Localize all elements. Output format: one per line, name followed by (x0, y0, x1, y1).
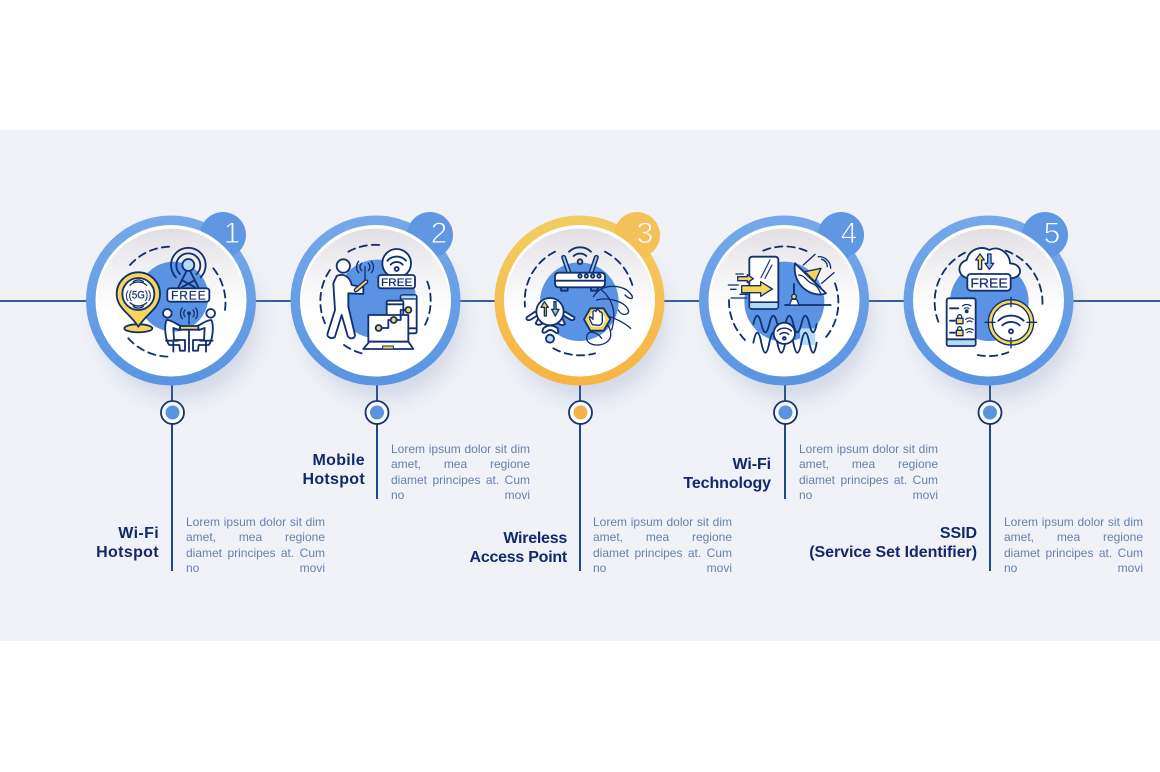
body text (391, 442, 530, 502)
body text: diamet principes at. Cum (391, 473, 530, 487)
connector and node (774, 385, 797, 499)
body text: Lorem ipsum dolor sit dim (593, 515, 732, 529)
body text (1004, 515, 1143, 575)
step 5: SSID (809, 212, 1143, 575)
icon: mobile hotspot: FREE (381, 277, 413, 289)
numbered circle frame: 1 (224, 217, 240, 250)
body text: no movi (799, 488, 938, 502)
title (809, 524, 977, 560)
connector and node (569, 385, 592, 571)
step 2: Mobile Hotspot (290, 212, 530, 502)
title: Technology (683, 474, 771, 492)
numbered circle frame (494, 212, 667, 400)
body text (186, 515, 325, 575)
step 1: Wi-Fi Hotspot (86, 212, 325, 575)
numbered circle frame: 3 (637, 217, 653, 250)
body text: no movi (391, 488, 530, 502)
numbered circle frame: 5 (1044, 217, 1060, 250)
numbered circle frame (904, 212, 1076, 400)
numbered circle frame: 2 (431, 217, 447, 250)
body text: Lorem ipsum dolor sit dim (799, 442, 938, 456)
body text: Lorem ipsum dolor sit dim (186, 515, 325, 529)
numbered circle frame (699, 212, 872, 400)
title (683, 456, 771, 492)
title: SSID (940, 524, 977, 542)
body text: Lorem ipsum dolor sit dim (1004, 515, 1143, 529)
body text: Lorem ipsum dolor sit dim (391, 442, 530, 456)
body text: amet, mea regione (186, 530, 325, 544)
numbered circle frame (290, 212, 463, 400)
connector and node (161, 385, 184, 571)
icon: free 5G hotspot (117, 247, 225, 357)
step 4: Wi-Fi Technology (683, 212, 938, 502)
icon: mobile hotspot (320, 245, 431, 353)
body text: no movi (186, 561, 325, 575)
body text: diamet principes at. Cum (593, 546, 732, 560)
body text: no movi (593, 561, 732, 575)
body text: diamet principes at. Cum (799, 473, 938, 487)
connector and node (978, 385, 1002, 571)
title: Wi-Fi (733, 456, 771, 472)
icon: SSID (935, 248, 1042, 356)
title: Wireless (503, 530, 567, 546)
icon: free 5G hotspot: ((5G)) (125, 289, 152, 301)
title: (Service Set Identifier) (809, 544, 977, 560)
body text: amet, mea regione (593, 530, 732, 544)
body text (799, 442, 938, 502)
title: Hotspot (96, 544, 159, 560)
title: Hotspot (302, 470, 365, 488)
body text: diamet principes at. Cum (186, 546, 325, 560)
body text: amet, mea regione (799, 457, 938, 471)
title (96, 524, 159, 560)
icon: wi-fi technology (728, 246, 838, 353)
icon: SSID: FREE (970, 275, 1008, 290)
body text (593, 515, 732, 575)
step 3: Wireless Access Point (470, 212, 732, 575)
icon: free 5G hotspot: FREE (171, 288, 206, 302)
title (302, 452, 365, 488)
body text: amet, mea regione (391, 457, 530, 471)
numbered circle frame (86, 212, 259, 400)
title: Wi-Fi (118, 524, 159, 542)
background band (0, 130, 1160, 641)
numbered circle frame: 4 (841, 217, 857, 250)
icon: wireless access point (525, 247, 632, 355)
title: Access Point (470, 548, 567, 566)
title (470, 530, 567, 566)
body text: diamet principes at. Cum (1004, 546, 1143, 560)
body text: amet, mea regione (1004, 530, 1143, 544)
connector and node (366, 385, 388, 499)
body text: no movi (1004, 561, 1143, 575)
title: Mobile (313, 452, 365, 468)
